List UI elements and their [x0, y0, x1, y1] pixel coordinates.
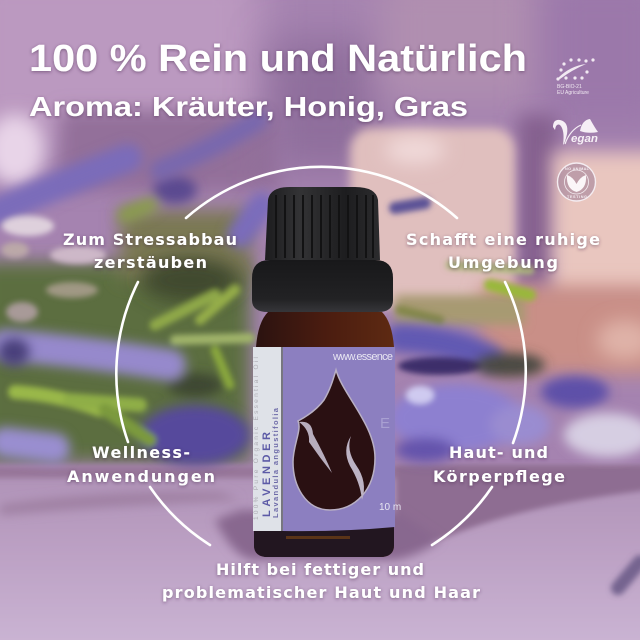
label partial text: E	[380, 415, 390, 432]
candles	[350, 128, 640, 375]
label: purple panel	[283, 347, 395, 531]
label volume: 10 m	[379, 502, 401, 513]
icon: no animal testing: NO ANIMAL	[565, 167, 590, 171]
amber glass	[254, 312, 394, 557]
label: white strip: 100% Pure Organic Essential Oil	[253, 356, 260, 520]
icon: vegan: egan	[571, 133, 598, 145]
label: calm environment: Umgebung	[448, 253, 558, 272]
circular arcs	[116, 167, 526, 545]
lower sprig	[5, 442, 55, 448]
green leaves	[155, 295, 215, 325]
label: white strip	[253, 347, 283, 531]
label: white strip: Lavandula angustifolia	[271, 407, 280, 518]
label: oily skin and hair: problematischer Haut und Haar	[162, 583, 480, 602]
right lavender	[400, 338, 490, 358]
label drop icon	[293, 370, 375, 510]
label: white strip: LAVENDER	[261, 432, 273, 517]
label: skin and body care: Körperpflege	[433, 467, 565, 486]
icon: EU organic leaf	[556, 58, 595, 96]
icon: EU organic leaf: EU Agriculture	[557, 90, 589, 96]
label: calm environment: Schafft eine ruhige	[406, 230, 600, 249]
pale highlights	[2, 216, 54, 236]
label: stress relief	[63, 230, 237, 272]
base highlight	[286, 536, 350, 539]
label: stress relief: zerstäuben	[94, 253, 207, 272]
label: calm environment	[406, 230, 600, 272]
label: skin and body care	[433, 443, 565, 486]
back wall	[0, 0, 640, 285]
icon: EU organic leaf: BG-BIO-21	[557, 84, 582, 90]
foliage base left	[0, 262, 250, 462]
glass base	[254, 527, 394, 557]
label: oily skin and hair	[162, 560, 480, 602]
label: oily skin and hair: Hilft bei fettiger und	[216, 560, 424, 579]
label: wellness: Wellness-	[92, 443, 190, 462]
label: skin and body care: Haut- und	[449, 443, 548, 462]
middle sprig	[5, 345, 170, 365]
table	[0, 466, 640, 640]
cap	[265, 187, 380, 260]
label: wellness: Anwendungen	[67, 467, 215, 486]
collar	[252, 260, 393, 312]
label: wellness	[67, 443, 215, 486]
lavender sprigs and foliage	[0, 120, 640, 588]
icon: no animal testing	[558, 163, 596, 201]
label web address: www.essence	[332, 351, 393, 363]
subtitle: Aroma: Kräuter, Honig, Gras	[29, 91, 468, 122]
title: 100 % Rein und Natürlich	[29, 38, 527, 80]
bottle	[252, 187, 401, 557]
label: stress relief: Zum Stressabbau	[63, 230, 237, 249]
icon: vegan	[553, 119, 598, 145]
foreground sprig	[618, 562, 640, 588]
icon: no animal testing: TESTING	[567, 195, 587, 199]
dark areas	[140, 258, 240, 302]
